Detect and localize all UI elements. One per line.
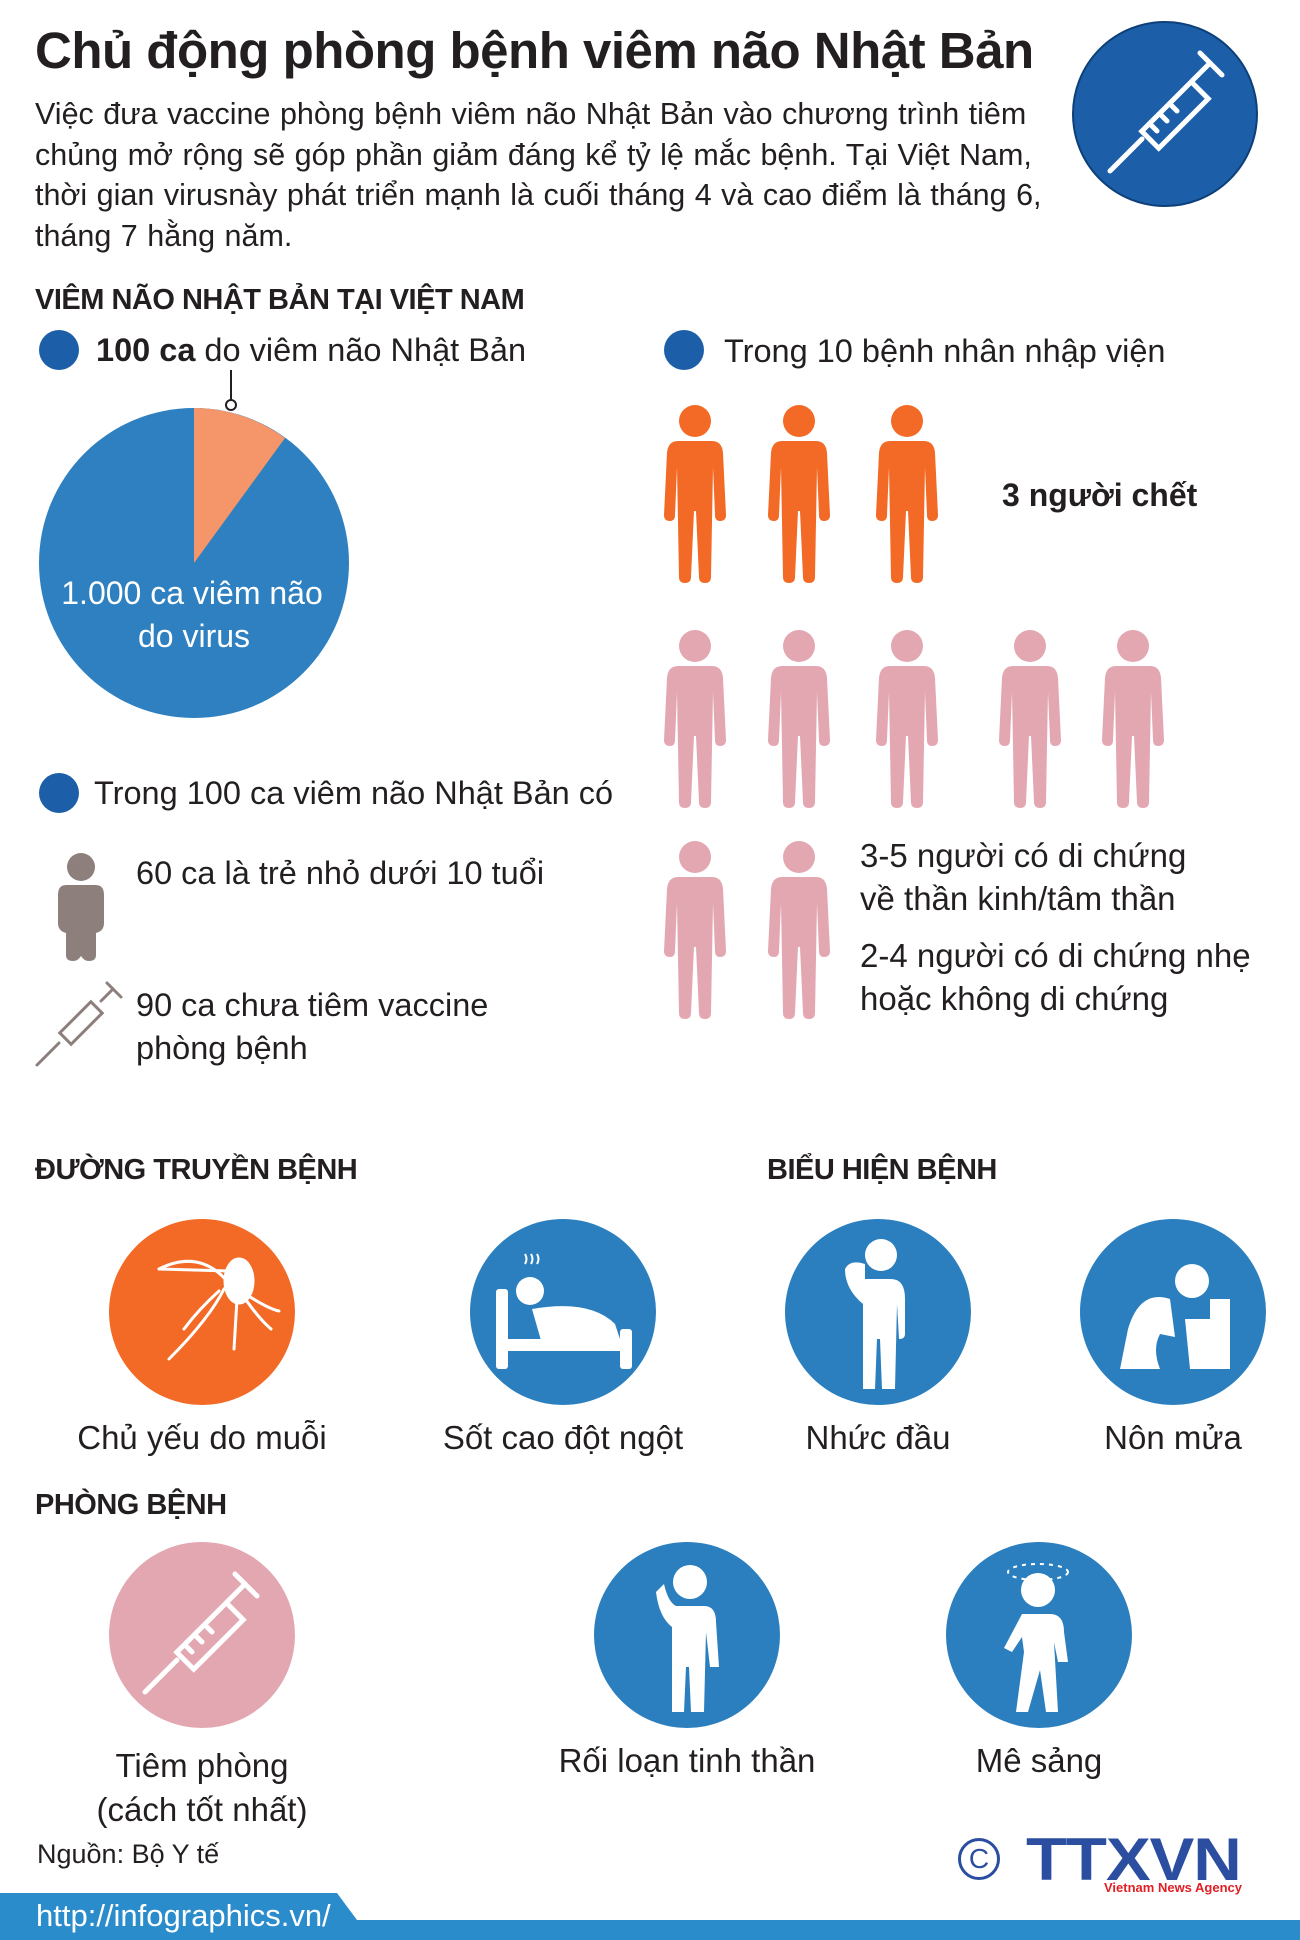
intro text: tháng 7 hằng năm. (35, 218, 292, 252)
label: non mua: Nôn mửa (1104, 1419, 1242, 1456)
intro text: chủng mở rộng sẽ góp phần giảm đáng kể tỷ lệ mắc bệnh. Tại Việt Nam, (35, 138, 1032, 172)
icon: headache (785, 1219, 971, 1405)
icon: mosquito (109, 1219, 295, 1405)
pie chart (39, 370, 349, 718)
source: Nguồn: Bộ Y tế (37, 1839, 219, 1869)
footer bar (0, 1893, 1300, 1940)
footer bar: http://infographics.vn/ (36, 1898, 331, 1933)
label: 3 nguoi chet: 3 người chết (1002, 477, 1197, 513)
text: 60 ca: 60 ca là trẻ nhỏ dưới 10 tuổi (136, 855, 544, 891)
label: tiem phong (97, 1747, 307, 1828)
pie chart: do virus (138, 618, 250, 654)
label: di chung: 3-5 người có di chứng (860, 837, 1186, 874)
heading: viem nao nhat ban tai viet nam: VIÊM NÃO NHẬT BẢN TẠI VIỆT NAM (35, 284, 524, 316)
label: nhuc dau: Nhức đầu (805, 1419, 950, 1456)
intro text: thời gian virusnày phát triển mạnh là cuối tháng 4 và cao điểm là tháng 6, (35, 178, 1042, 212)
label: di chung: hoặc không di chứng (860, 980, 1168, 1017)
text: 90 ca: 90 ca chưa tiêm vaccine (136, 987, 488, 1023)
heading: duong truyen benh: ĐƯỜNG TRUYỀN BỆNH (35, 1154, 357, 1186)
icon: syringe circle (1072, 21, 1258, 207)
icon: fever (470, 1219, 656, 1405)
title: Chủ động phòng bệnh viêm não Nhật Bản (35, 22, 1034, 79)
logo: TTXVN: C (969, 1843, 989, 1874)
text: 90 ca: phòng bệnh (136, 1030, 308, 1066)
icon: gray syringe (35, 981, 123, 1066)
icon: delirium (946, 1542, 1132, 1728)
people: 3 deaths (664, 405, 1164, 1019)
legend: trong 100 ca: Trong 100 ca viêm não Nhật Bản có (94, 775, 613, 811)
icon: child (58, 853, 104, 961)
label: tiem phong: Tiêm phòng (115, 1747, 289, 1784)
text: 90 ca (136, 987, 488, 1066)
intro text (35, 97, 1042, 252)
legend: trong 10 benh nhan: Trong 10 bệnh nhân nhập viện (724, 333, 1166, 369)
pie chart: 1.000 ca viêm não (61, 575, 323, 611)
logo: TTXVN: TTXVN (1026, 1826, 1241, 1893)
logo: TTXVN: Vietnam News Agency (1104, 1880, 1242, 1895)
label: me sang: Mê sảng (976, 1742, 1102, 1779)
icon: vomit (1080, 1219, 1266, 1405)
label: tiem phong: (cách tốt nhất) (97, 1791, 307, 1828)
legend: 100 ca: 100 ca do viêm não Nhật Bản (96, 332, 526, 368)
icon: mental disorder (594, 1542, 780, 1728)
label: di chung: về thần kinh/tâm thần 2-4 người có di chứng nhẹ (860, 880, 1251, 974)
heading: phong benh: PHÒNG BỆNH (35, 1489, 227, 1521)
label: roi loan tinh than: Rối loạn tinh thần (559, 1742, 815, 1779)
label: chu yeu do muoi: Chủ yếu do muỗi (77, 1419, 327, 1456)
label: di chung (860, 837, 1251, 1017)
intro text: Việc đưa vaccine phòng bệnh viêm não Nhật Bản vào chương trình tiêm (35, 97, 1026, 131)
label: sot cao: Sốt cao đột ngột (443, 1419, 683, 1456)
icon: vaccine pink (109, 1542, 295, 1728)
heading: bieu hien benh: BIỂU HIỆN BỆNH (767, 1154, 997, 1186)
